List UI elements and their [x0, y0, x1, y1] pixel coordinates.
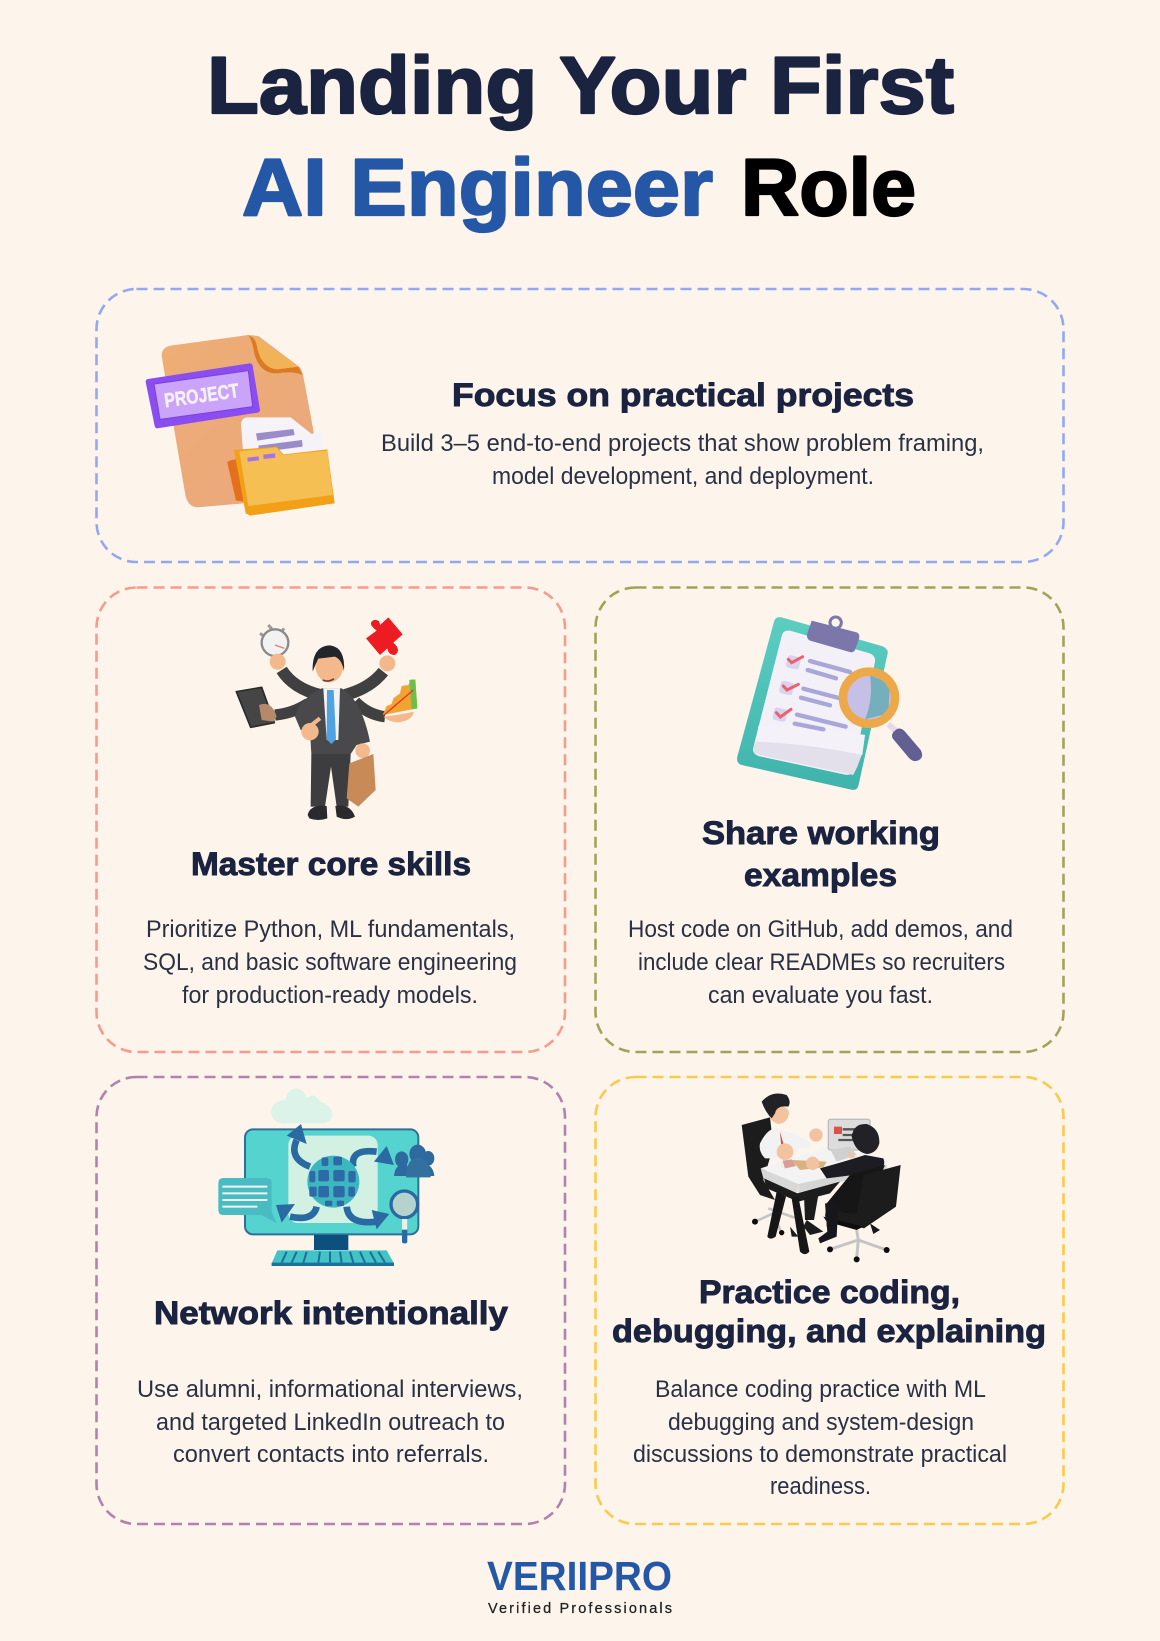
text block [381, 430, 984, 490]
title: AI Engineer [242, 143, 713, 233]
heading [612, 1274, 1046, 1349]
panel: practice coding, debugging, and explaining [596, 1077, 1064, 1524]
panel: focus on practical projects [96, 289, 1064, 562]
text block: debugging and system-design [668, 1409, 974, 1436]
text block: and targeted LinkedIn outreach to [156, 1409, 505, 1436]
text block: Build 3–5 end-to-end projects that show problem framing, [381, 430, 984, 457]
text block: Balance coding practice with ML [655, 1376, 986, 1403]
text block: discussions to demonstrate practical [633, 1441, 1007, 1468]
text block [633, 1376, 1007, 1500]
text block: for production-ready models. [182, 982, 478, 1009]
heading: Share working [702, 815, 940, 851]
heading: Focus on practical projects [452, 377, 914, 413]
heading: Master core skills [191, 846, 471, 882]
text block: model development, and deployment. [492, 463, 874, 490]
text block: Prioritize Python, ML fundamentals, [146, 916, 515, 943]
title [207, 41, 954, 233]
heading: Practice coding, [699, 1274, 960, 1310]
text block: readiness. [770, 1473, 871, 1500]
text block: SQL, and basic software engineering [143, 949, 517, 976]
panel: master core skills [96, 588, 565, 1052]
logo: VERIIPRO: Verified Professionals [488, 1601, 672, 1617]
icon: multitasking businessman [236, 617, 417, 820]
text block [628, 916, 1013, 1009]
heading: Network intentionally [154, 1295, 508, 1331]
title: Role [741, 143, 916, 233]
text block: Use alumni, informational interviews, [137, 1376, 523, 1403]
logo: VERIIPRO: VERIIPRO [487, 1553, 672, 1599]
panel: network intentionally [96, 1077, 565, 1524]
text block: include clear READMEs so recruiters [638, 949, 1005, 976]
icon: project folder [148, 335, 335, 516]
title: Landing Your First [207, 41, 954, 131]
text block [143, 916, 517, 1009]
heading: examples [744, 857, 897, 893]
text block [137, 1376, 523, 1468]
icon: interview at desk [742, 1093, 901, 1262]
icon: clipboard with magnifier [737, 617, 922, 790]
heading [702, 815, 940, 893]
text block: convert contacts into referrals. [173, 1441, 489, 1468]
icon: networked monitor [218, 1088, 434, 1266]
panel: share working examples [596, 588, 1064, 1052]
heading: debugging, and explaining [612, 1313, 1046, 1349]
text block: can evaluate you fast. [708, 982, 933, 1009]
logo: VERIIPRO [487, 1553, 672, 1617]
text block: Host code on GitHub, add demos, and [628, 916, 1013, 943]
label: PROJECT badge text: PROJECT [163, 380, 240, 412]
